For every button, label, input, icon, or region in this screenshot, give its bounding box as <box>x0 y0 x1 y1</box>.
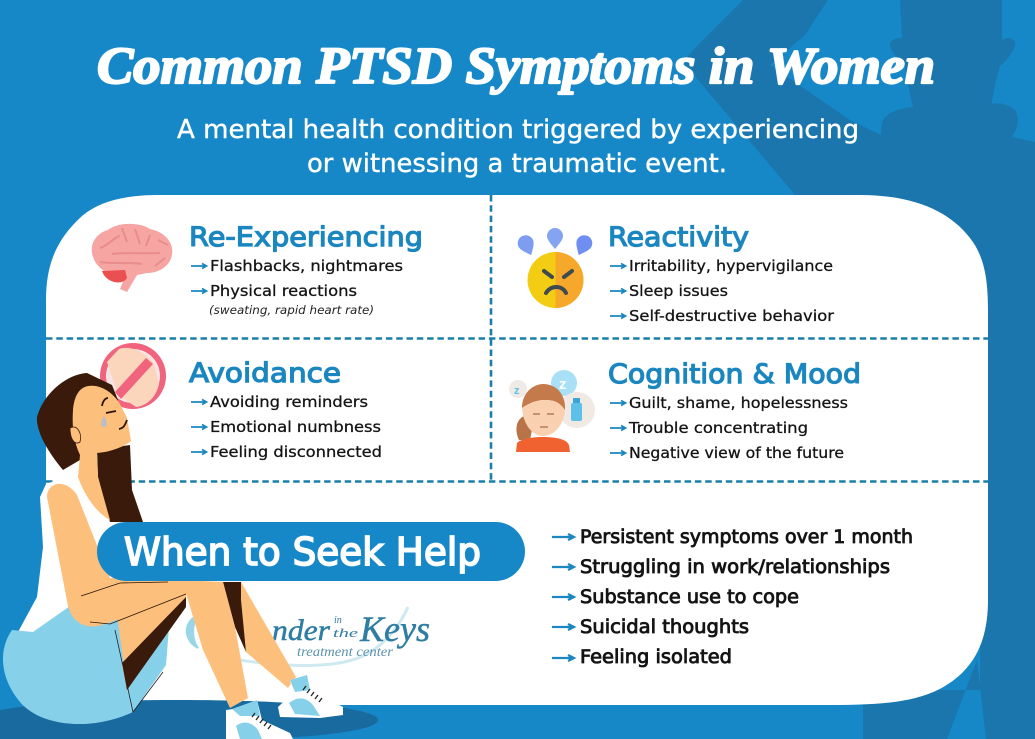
panel: cognition and mood: Negative view of the future <box>629 444 844 462</box>
help checklist <box>552 527 913 668</box>
icon: brain <box>92 224 172 292</box>
help checklist: Suicidal thoughts <box>580 617 749 638</box>
panel: reactivity: Sleep issues <box>629 282 728 300</box>
front shoe <box>226 700 293 739</box>
logo: in <box>334 615 342 626</box>
long hair <box>97 445 143 522</box>
floor shadow <box>0 700 378 739</box>
panel: cognition and mood: Guilt, shame, hopelessness <box>629 394 848 412</box>
panel: avoidance: Emotional numbness <box>210 418 381 436</box>
panel: re-experiencing <box>189 222 423 317</box>
shirt <box>18 470 150 640</box>
panel: avoidance: Feeling disconnected <box>210 443 382 461</box>
panel: reactivity: Irritability, hypervigilance <box>629 257 833 275</box>
help checklist: Struggling in work/relationships <box>580 557 890 578</box>
panel: reactivity <box>608 222 835 325</box>
logo: the <box>333 625 358 640</box>
logo: Keys <box>359 609 430 649</box>
heading: re-experiencing: Re-Experiencing <box>189 222 423 253</box>
panel: re-experiencing: Physical reactions <box>210 282 357 300</box>
when to seek help pill: When to Seek Help <box>124 530 481 574</box>
icon: tired girl: z <box>514 385 520 397</box>
white content panel <box>46 195 988 705</box>
back shoe <box>278 675 343 718</box>
subtitle <box>177 115 859 179</box>
icon: tired girl: z <box>559 376 566 393</box>
panel: reactivity: Self-destructive behavior <box>629 307 835 325</box>
logo: treatment center <box>297 645 394 660</box>
background silhouette <box>683 0 1035 739</box>
when to seek help pill <box>97 522 525 581</box>
legs <box>115 580 186 695</box>
panel: avoidance <box>189 358 382 461</box>
heading: avoidance: Avoidance <box>189 358 341 389</box>
illustration: sitting woman <box>3 373 343 739</box>
panel: cognition and mood: Trouble concentrating <box>628 419 808 437</box>
arm <box>47 484 190 626</box>
help checklist: Persistent symptoms over 1 month <box>580 527 913 548</box>
help checklist: Substance use to cope <box>580 587 799 608</box>
logo: nder <box>272 614 330 647</box>
icon: angry face <box>515 228 595 308</box>
panel: avoidance: Avoiding reminders <box>210 393 368 411</box>
dashed dividers <box>46 195 988 482</box>
subtitle: or witnessing a traumatic event. <box>307 149 727 179</box>
heading: reactivity: Reactivity <box>608 222 749 253</box>
panel: re-experiencing: (sweating, rapid heart rate) <box>209 303 374 317</box>
icon: stop hand <box>100 343 166 409</box>
logo <box>187 607 430 665</box>
back of head <box>37 373 118 470</box>
subtitle: A mental health condition triggered by experiencing <box>177 115 859 145</box>
skirt <box>3 577 172 724</box>
face and neck <box>73 386 131 520</box>
panel: cognition and mood <box>608 359 861 462</box>
heading: cognition and mood: Cognition & Mood <box>608 359 861 390</box>
help checklist: Feeling isolated <box>580 647 732 668</box>
panel: re-experiencing: Flashbacks, nightmares <box>210 257 403 275</box>
icon: tired girl <box>509 370 595 452</box>
title: Common PTSD Symptoms in Women <box>97 38 935 95</box>
